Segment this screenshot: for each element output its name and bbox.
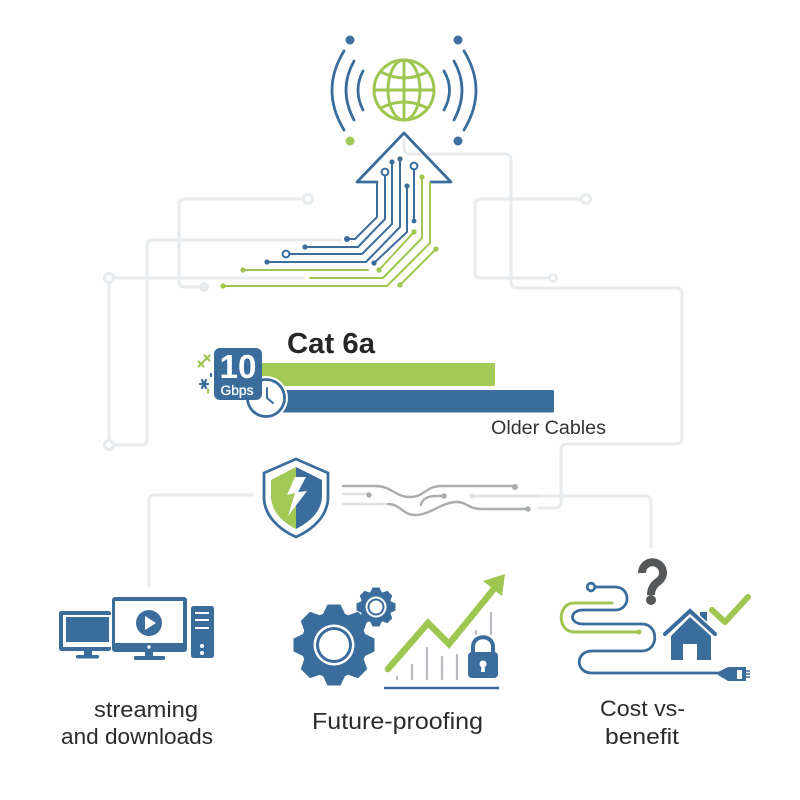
icon: computer monitors and tower — [59, 597, 214, 660]
label: streaming and downloads: streaming — [94, 697, 198, 722]
label: streaming and downloads — [61, 697, 213, 749]
icon: signal dots — [346, 36, 462, 146]
tower — [191, 606, 214, 658]
chart bars — [397, 613, 491, 679]
check mark — [712, 597, 748, 622]
small gear — [356, 588, 396, 626]
faint wire stubs — [343, 494, 540, 504]
main monitor with play button — [112, 597, 187, 660]
icon: signal arcs — [332, 51, 476, 130]
icon: clock — [244, 376, 288, 420]
badge: 10 Gbps: Gbps — [220, 383, 254, 398]
icon: cable, house, question mark and check — [561, 562, 750, 681]
blue cable — [572, 583, 718, 673]
label: Cost vs-benefit: Cost vs- — [600, 696, 685, 721]
bar: Cat 6a — [255, 363, 495, 386]
green trend arrow — [388, 574, 505, 669]
badge: 10 Gbps — [214, 348, 262, 400]
label: Cost vs-benefit — [600, 696, 685, 749]
arrow outline — [357, 133, 451, 182]
padlock — [468, 637, 498, 678]
left monitor — [59, 611, 111, 658]
icon: speed sparks — [198, 356, 211, 392]
large gear — [294, 604, 374, 686]
bar chart: speed comparison — [198, 348, 554, 420]
icon: globe with signal waves — [332, 36, 476, 146]
grey wires — [343, 486, 528, 515]
icon: gears — [294, 588, 396, 686]
label: Cost vs-benefit: benefit — [605, 724, 679, 749]
blue traces — [264, 156, 417, 266]
ethernet plug — [718, 667, 750, 681]
icon: growth chart with padlock — [384, 574, 505, 688]
question mark — [642, 562, 663, 605]
chart baseline — [384, 687, 499, 689]
icon: shield with lightning bolt — [264, 459, 328, 537]
icon: globe — [374, 60, 434, 120]
bar: older cables — [270, 390, 554, 412]
wire end dots — [366, 484, 531, 512]
badge: 10 Gbps: 10 — [220, 348, 256, 385]
heading: Cat 6a: Cat 6a — [287, 328, 376, 360]
label: streaming and downloads: and downloads — [61, 724, 213, 749]
green traces — [220, 174, 439, 289]
green cable — [561, 603, 642, 634]
icon: circuit upload arrow — [220, 133, 451, 289]
connector network: light grey traces — [104, 140, 682, 586]
house — [665, 611, 715, 660]
icon: tangled older wires — [343, 484, 540, 515]
label: Future-proofing: Future-proofing — [312, 708, 483, 734]
label: Older Cables: Older Cables — [491, 417, 606, 439]
